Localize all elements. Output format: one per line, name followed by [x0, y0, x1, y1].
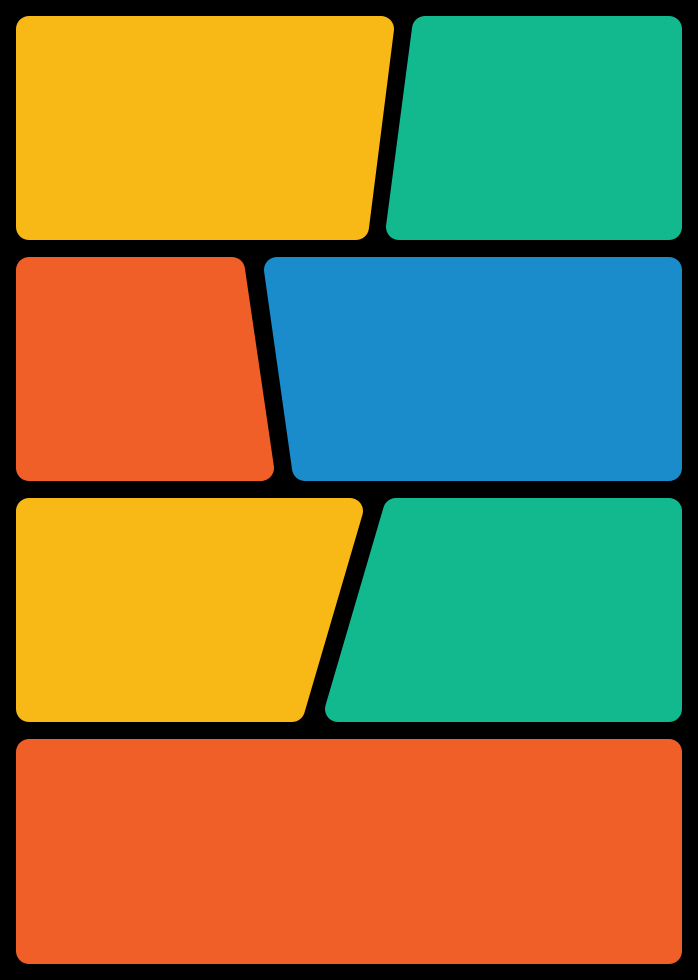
panel: orange middle-left [29, 270, 261, 468]
panel: yellow top-left [29, 29, 381, 227]
panel: green lower-right [338, 511, 669, 709]
panel: green top-right [399, 29, 669, 227]
panel: orange bottom [29, 752, 669, 951]
panel: yellow lower-left [29, 511, 350, 709]
panel: blue middle-right [277, 270, 669, 468]
